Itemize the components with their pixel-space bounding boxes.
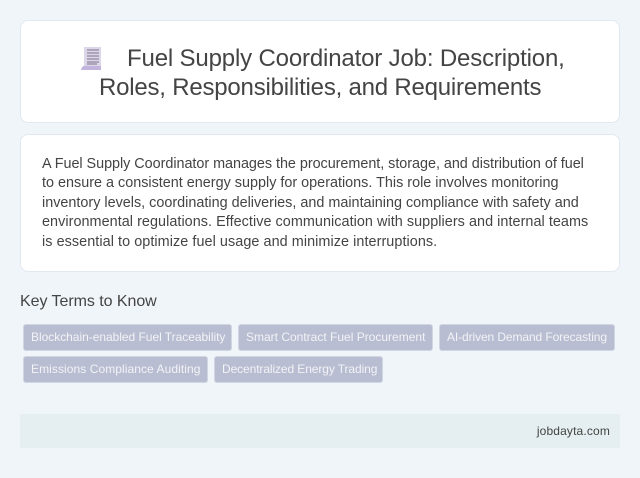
tag list: [23, 324, 615, 383]
panel: title card: [20, 20, 620, 123]
description text: A Fuel Supply Coordinator manages the procurement, storage, and distribution of fuel: [42, 156, 584, 172]
description text: is essential to optimize fuel usage and minimize interruptions.: [42, 234, 437, 250]
footer source text: jobdayta.com: [537, 424, 610, 438]
tag: Smart Contract Fuel Procurement: [246, 330, 425, 344]
description text: inventory levels, coordinating deliveries, and maintaining compliance with safety and: [42, 195, 579, 211]
heading: key terms: Key Terms to Know: [20, 293, 157, 310]
tag: [439, 324, 615, 351]
tag: Emissions Compliance Auditing: [31, 362, 200, 376]
description text: environmental regulations. Effective communication with suppliers and internal teams: [42, 214, 588, 230]
panel: description card: [20, 134, 620, 272]
tag: Decentralized Energy Trading: [222, 362, 377, 376]
tag: [214, 356, 383, 383]
tag: [23, 324, 232, 351]
tag: Blockchain-enabled Fuel Traceability: [31, 330, 225, 344]
title: Roles, Responsibilities, and Requirements: [99, 74, 541, 101]
description text: [42, 156, 588, 250]
description text: to ensure a consistent energy supply for operations. This role involves monitoring: [42, 175, 558, 191]
icon: document scroll: [81, 47, 101, 70]
title: [99, 45, 565, 101]
footer bar: [20, 414, 620, 448]
title: Fuel Supply Coordinator Job: Description,: [127, 45, 565, 72]
tag: AI-driven Demand Forecasting: [447, 330, 607, 344]
tag: [238, 324, 433, 351]
tag: [23, 356, 208, 383]
